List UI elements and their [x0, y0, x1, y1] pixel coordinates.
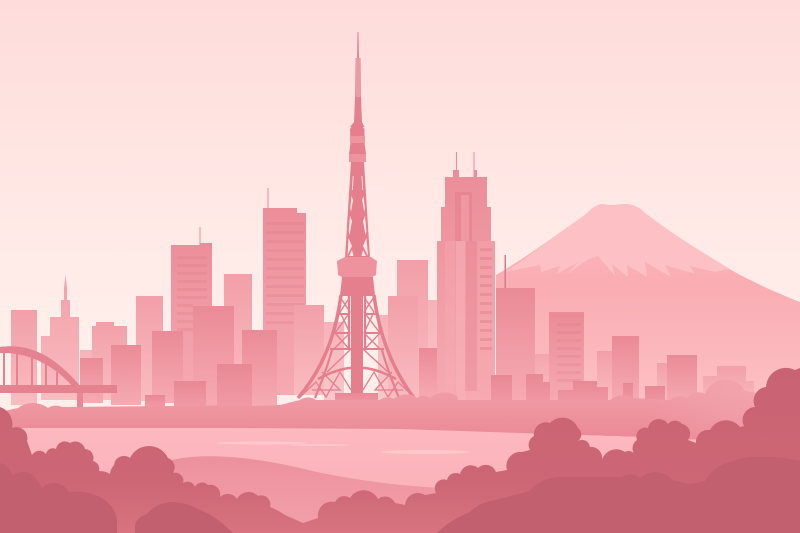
buildings and antenna right of skyscraper — [496, 255, 754, 405]
Mount Fuji — [496, 204, 800, 410]
low hill in the bay — [165, 456, 440, 533]
antenna — [350, 32, 364, 127]
bridge — [0, 346, 117, 407]
building — [224, 274, 252, 399]
front tree layer, right — [437, 457, 800, 533]
building — [294, 305, 324, 395]
back row buildings, left — [11, 275, 163, 405]
front row buildings, left — [80, 306, 277, 407]
river — [0, 428, 800, 533]
buildings right of the tower — [388, 260, 437, 400]
window stripes — [480, 248, 492, 350]
upper shaft — [345, 162, 370, 258]
back tree layer — [0, 368, 800, 533]
front tree layer, left — [0, 463, 117, 533]
front tree layer, center — [135, 502, 233, 533]
water highlights — [217, 442, 470, 454]
mist ground band with tree line — [0, 380, 800, 445]
Tokyo Tower — [298, 32, 414, 398]
main observatory deck — [337, 257, 377, 277]
low foreground blocks — [335, 374, 665, 406]
tall striped building — [263, 188, 306, 395]
tall striped tower, left — [171, 227, 212, 395]
center column — [351, 296, 363, 393]
distant pale buildings — [80, 300, 551, 404]
snow cap with jagged edge — [505, 204, 730, 277]
top observatory — [349, 125, 366, 162]
lower solid shaft — [340, 277, 375, 296]
upper lattice gaps — [347, 176, 368, 256]
twin-antenna skyscraper — [437, 152, 495, 401]
lower legs — [298, 295, 414, 398]
